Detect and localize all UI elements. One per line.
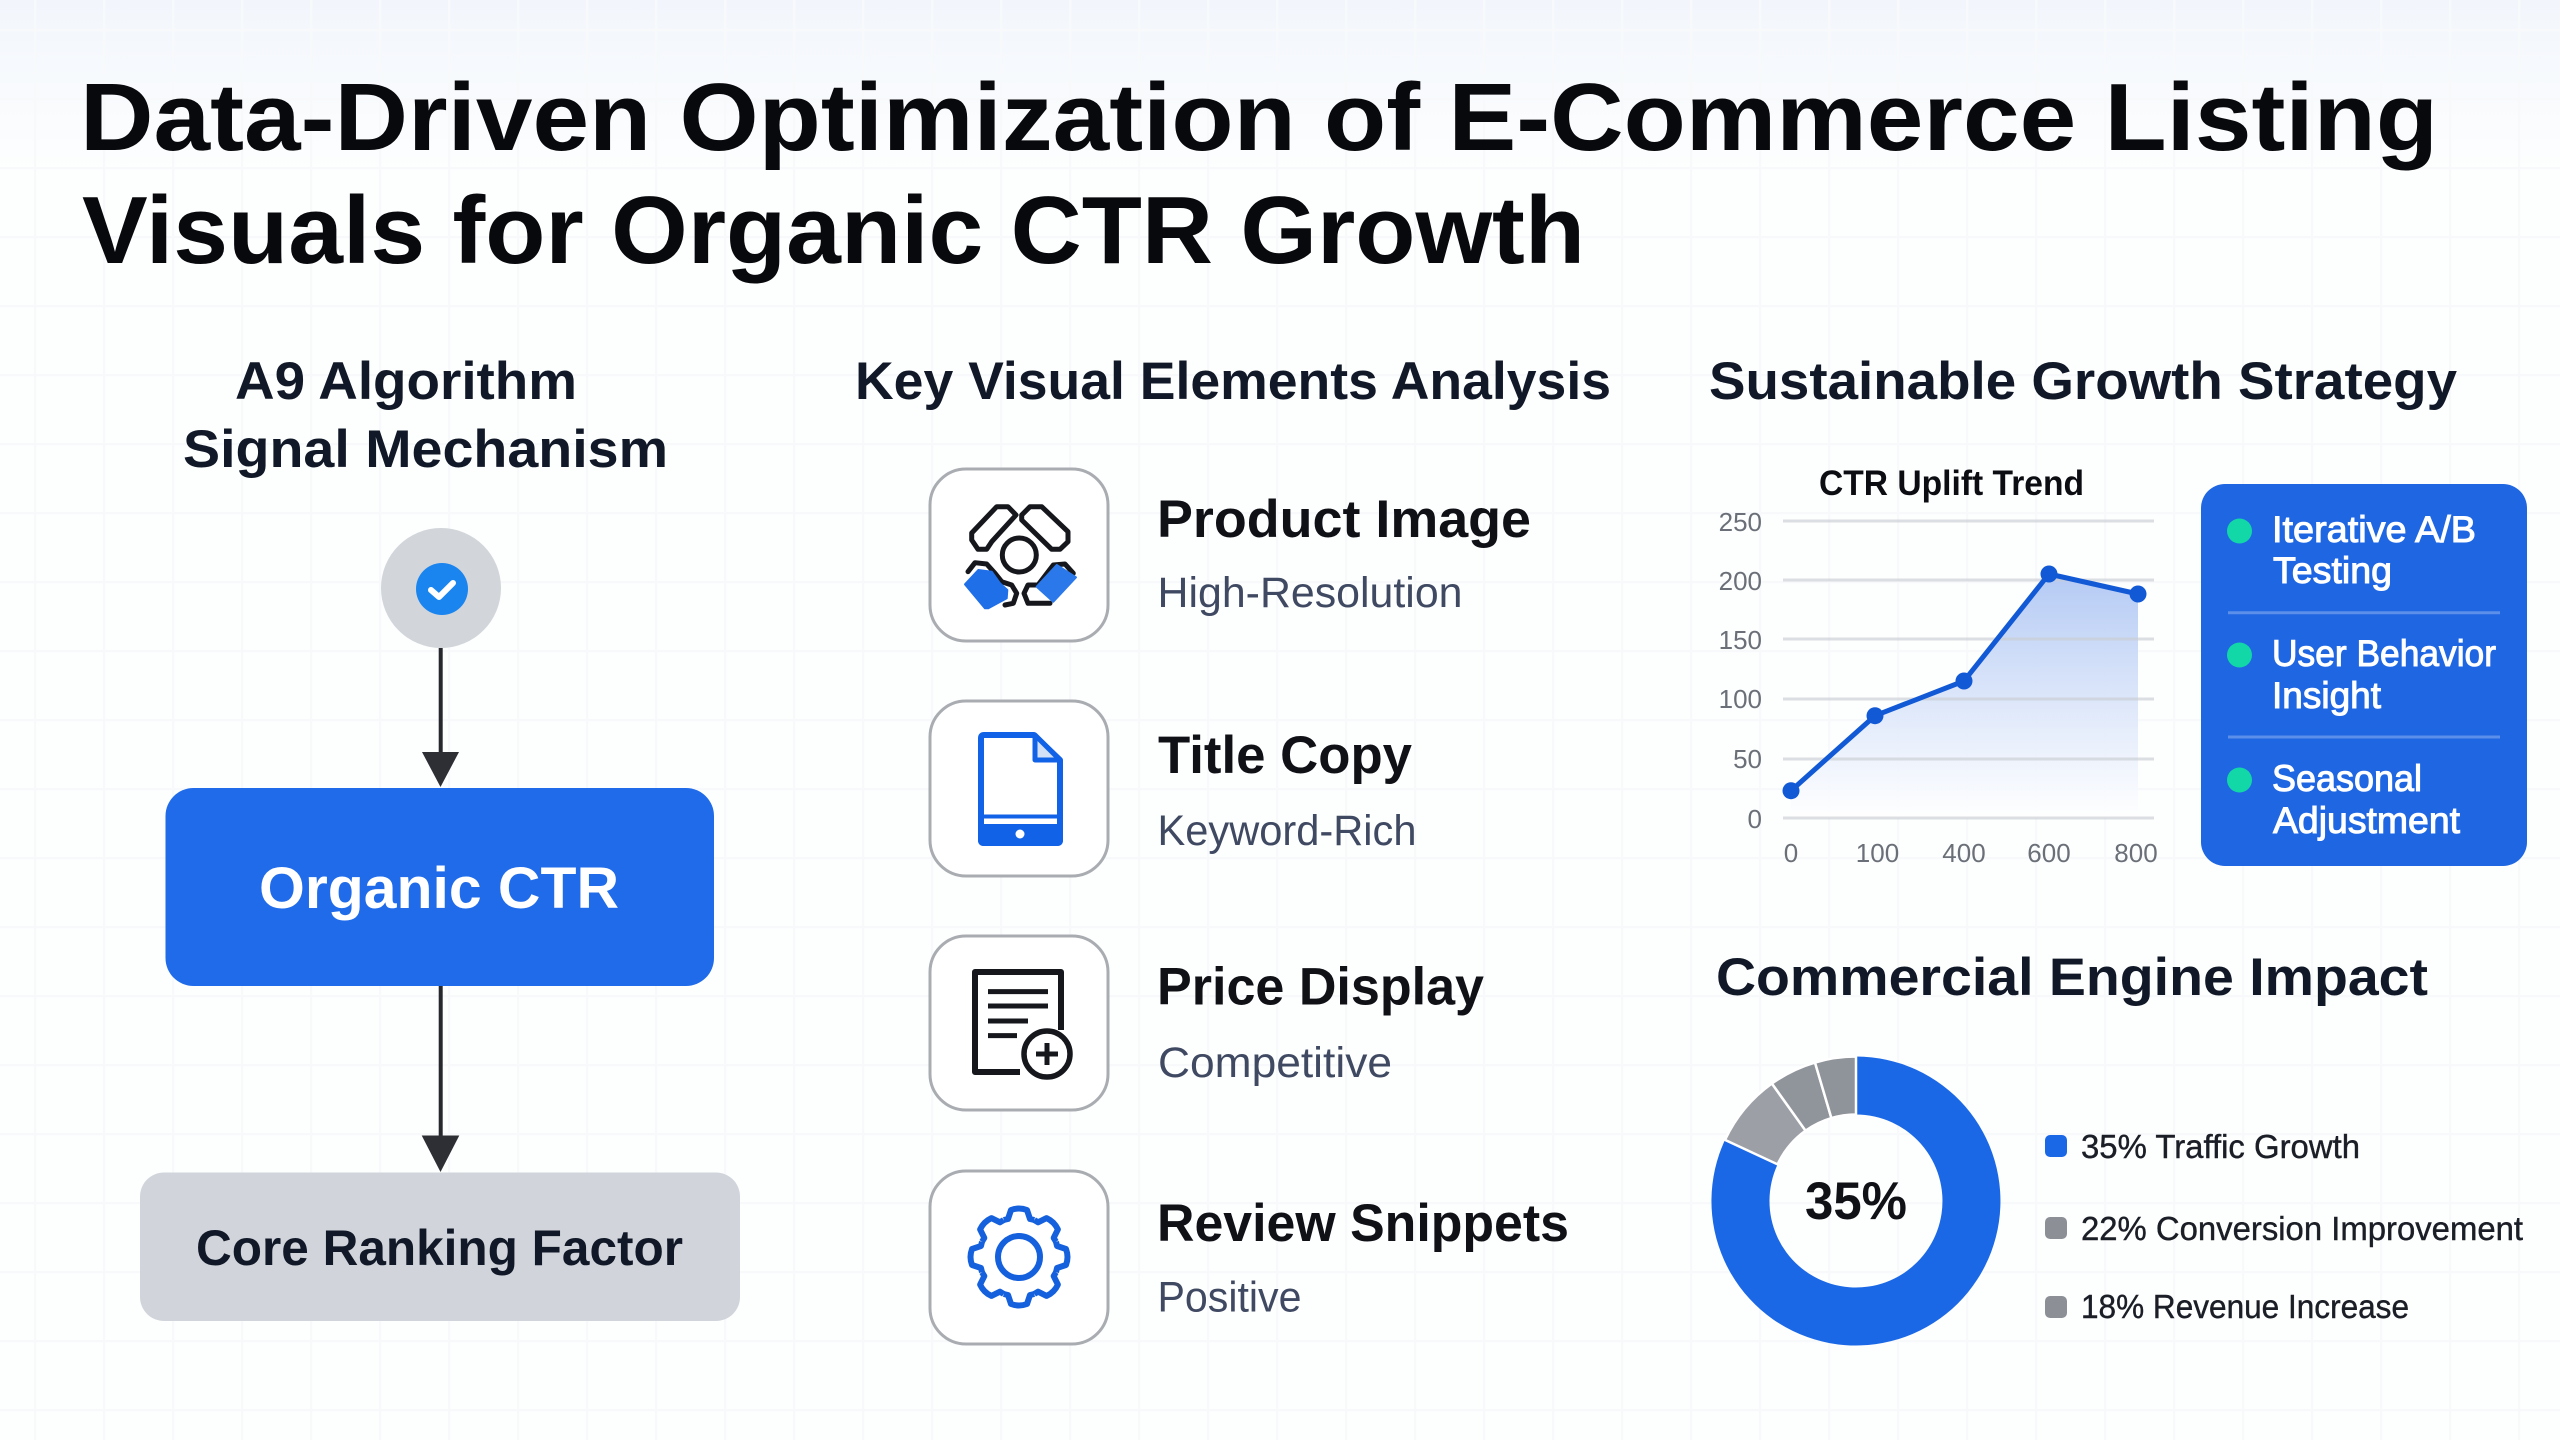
box: Organic CTR: Organic CTR — [259, 856, 619, 921]
x axis labels: 800 — [2114, 838, 2158, 868]
x axis labels: 100 — [1856, 838, 1899, 868]
x axis labels: 0 — [1784, 838, 1798, 868]
list item: Iterative A/B Testing: Testing — [2273, 550, 2392, 591]
title — [80, 64, 2438, 284]
text: Title Copy: Title Copy — [1158, 726, 1413, 785]
text: Price Display: Price Display — [1157, 958, 1485, 1016]
x axis labels: 600 — [2027, 838, 2071, 868]
donut centre value: 35% — [1805, 1172, 1907, 1231]
item: Title Copy — [930, 701, 1416, 876]
icon: price display document — [930, 936, 1108, 1110]
y axis labels: 150 — [1719, 625, 1762, 655]
heading: A9 Algorithm Signal Mechanism: A9 Algorithm — [235, 352, 577, 411]
chart title: CTR Uplift Trend — [1819, 464, 2084, 503]
list item: Iterative A/B Testing: Iterative A/B — [2272, 509, 2476, 550]
text: Price Display: Competitive — [1158, 1039, 1392, 1087]
heading: A9 Algorithm Signal Mechanism: Signal Mechanism — [183, 420, 668, 479]
x axis labels — [1784, 838, 2158, 868]
list item: Iterative A/B Testing — [2227, 509, 2476, 591]
y axis labels: 200 — [1719, 566, 1762, 596]
text: Product Image: High-Resolution — [1158, 569, 1462, 617]
area fill — [1791, 574, 2138, 818]
item: Product Image — [930, 469, 1531, 641]
heading: Commercial Engine Impact: Commercial Engine Impact — [1716, 948, 2428, 1007]
title: Data-Driven Optimization of E-Commerce Listing — [80, 64, 2438, 171]
text: Product Image: Product Image — [1157, 490, 1531, 549]
y axis labels: 50 — [1733, 744, 1762, 774]
arrow: organic CTR to core ranking factor — [422, 986, 459, 1172]
box: Organic CTR — [166, 788, 714, 986]
legend item: conversion improvement: 22% Conversion Improvement — [2081, 1210, 2523, 1247]
panel: key visual elements analysis — [855, 352, 1611, 1344]
list item: User Behavior Insight: Insight — [2272, 675, 2382, 716]
panel: sustainable growth strategy — [1709, 352, 2527, 868]
text: Review Snippets: Review Snippets — [1157, 1194, 1569, 1253]
text: Product Image — [1157, 490, 1531, 617]
donut chart — [1711, 1056, 2000, 1345]
legend — [2045, 1128, 2523, 1325]
list item: Seasonal Adjustment: Adjustment — [2273, 800, 2461, 841]
list item: Seasonal Adjustment: Seasonal — [2272, 758, 2422, 799]
callout: growth strategy list — [2201, 484, 2527, 866]
y axis labels: 100 — [1719, 684, 1762, 714]
legend item: traffic growth: 35% Traffic Growth — [2081, 1128, 2360, 1165]
item: Review Snippets — [930, 1171, 1569, 1344]
icon: review snippets gear — [930, 1171, 1108, 1344]
y axis labels — [1719, 507, 1762, 834]
text: Review Snippets: Positive — [1158, 1274, 1302, 1322]
text: Price Display — [1157, 958, 1485, 1087]
box: Core Ranking Factor — [140, 1172, 740, 1321]
panel: A9 algorithm signal mechanism — [140, 352, 740, 1321]
item: Price Display — [930, 936, 1485, 1110]
panel: commercial engine impact — [1711, 948, 2523, 1345]
x axis labels: 400 — [1942, 838, 1986, 868]
trend line with points — [1782, 566, 2146, 799]
list item: Seasonal Adjustment — [2227, 758, 2461, 841]
heading: A9 Algorithm Signal Mechanism — [183, 352, 668, 479]
text: Title Copy — [1158, 726, 1416, 855]
icon: verified signal badge — [381, 528, 501, 648]
icon: title copy document tablet — [930, 701, 1108, 876]
legend item: revenue increase: 18% Revenue Increase — [2081, 1288, 2409, 1325]
arrow: signal to organic CTR — [422, 648, 459, 787]
list item: User Behavior Insight: User Behavior — [2272, 633, 2496, 674]
icon: product image — [930, 469, 1108, 641]
y axis labels: 0 — [1748, 804, 1762, 834]
list item: User Behavior Insight — [2227, 633, 2496, 716]
text: Review Snippets — [1157, 1194, 1569, 1322]
heading: Key Visual Elements Analysis: Key Visual Elements Analysis — [855, 352, 1611, 411]
line chart: CTR Uplift Trend — [1719, 464, 2158, 868]
y axis labels: 250 — [1719, 507, 1762, 537]
title: Visuals for Organic CTR Growth — [82, 177, 1585, 284]
heading: Sustainable Growth Strategy: Sustainable Growth Strategy — [1709, 352, 2458, 411]
text: Title Copy: Keyword-Rich — [1158, 807, 1416, 855]
box: Core Ranking Factor: Core Ranking Factor — [196, 1220, 683, 1276]
